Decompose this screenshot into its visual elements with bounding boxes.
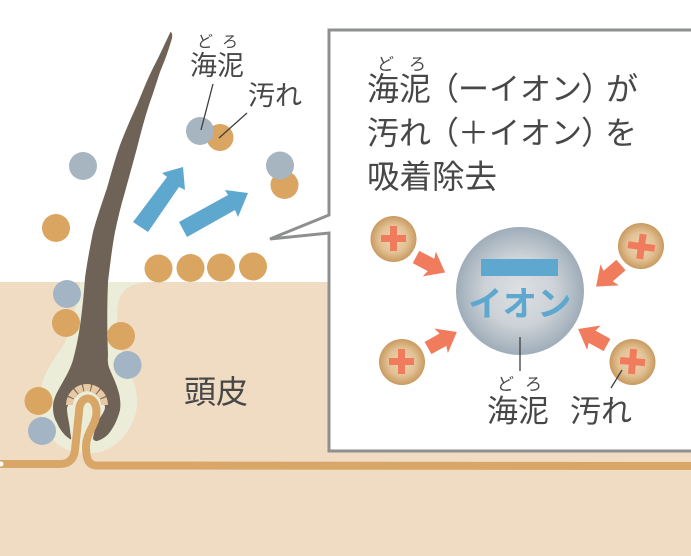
dirt and mud particles around the hair <box>24 152 142 445</box>
callout leader lines and labels: 汚れ <box>570 394 632 429</box>
callout heading: ） <box>581 115 613 151</box>
callout heading: 海泥 <box>367 71 431 107</box>
negative ion sphere <box>456 227 584 355</box>
attraction arrow: top right <box>587 254 630 297</box>
callout leader lines and labels: ろ <box>525 375 542 394</box>
callout heading: （ <box>427 115 459 151</box>
row of dirt particles on the scalp <box>144 252 267 282</box>
positive dirt particle: top right <box>618 223 664 269</box>
follicle sheath <box>40 282 156 453</box>
positive dirt particle: bottom left <box>379 339 425 385</box>
arrow: lifting up <box>133 167 185 232</box>
attraction arrow: top left <box>409 245 452 285</box>
callout heading: を <box>605 115 637 151</box>
mud and dirt pair <box>266 152 298 199</box>
callout heading: ーイオン <box>458 72 582 107</box>
mud and dirt pair with labels: 汚れ <box>248 81 302 111</box>
callout heading: （ <box>427 71 459 107</box>
callout panel <box>270 30 691 451</box>
arrow: lifting away <box>179 190 248 237</box>
positive dirt particle: top left <box>370 216 416 262</box>
scalp label: 頭皮 <box>184 374 248 410</box>
attraction arrow: bottom right <box>571 317 614 357</box>
callout heading <box>367 55 638 195</box>
callout heading: 吸着除去 <box>367 159 497 195</box>
negative ion sphere: イオン <box>468 286 572 324</box>
hair bulb cells <box>70 388 104 405</box>
hair shaft and root <box>53 32 172 441</box>
skin line and papilla <box>0 398 691 466</box>
callout leader lines and labels <box>487 337 632 429</box>
mud and dirt pair with labels <box>186 33 302 151</box>
mud and dirt pair with labels: ど <box>197 33 213 51</box>
mud and dirt pair with labels: 海泥 <box>190 51 244 81</box>
callout heading: ＋イオン <box>458 116 582 151</box>
callout heading: ど <box>377 55 394 74</box>
scalp background <box>0 282 691 556</box>
attraction arrow: bottom left <box>421 320 464 360</box>
callout heading: 汚れ <box>367 115 431 151</box>
callout heading: ろ <box>409 55 426 74</box>
callout heading: ） <box>581 71 613 107</box>
callout leader lines and labels: ど <box>497 375 514 394</box>
mud and dirt pair with labels: ろ <box>222 34 238 51</box>
callout heading: が <box>606 71 638 107</box>
callout leader lines and labels: 海泥 <box>487 394 549 429</box>
positive dirt particle: bottom right <box>610 339 656 385</box>
